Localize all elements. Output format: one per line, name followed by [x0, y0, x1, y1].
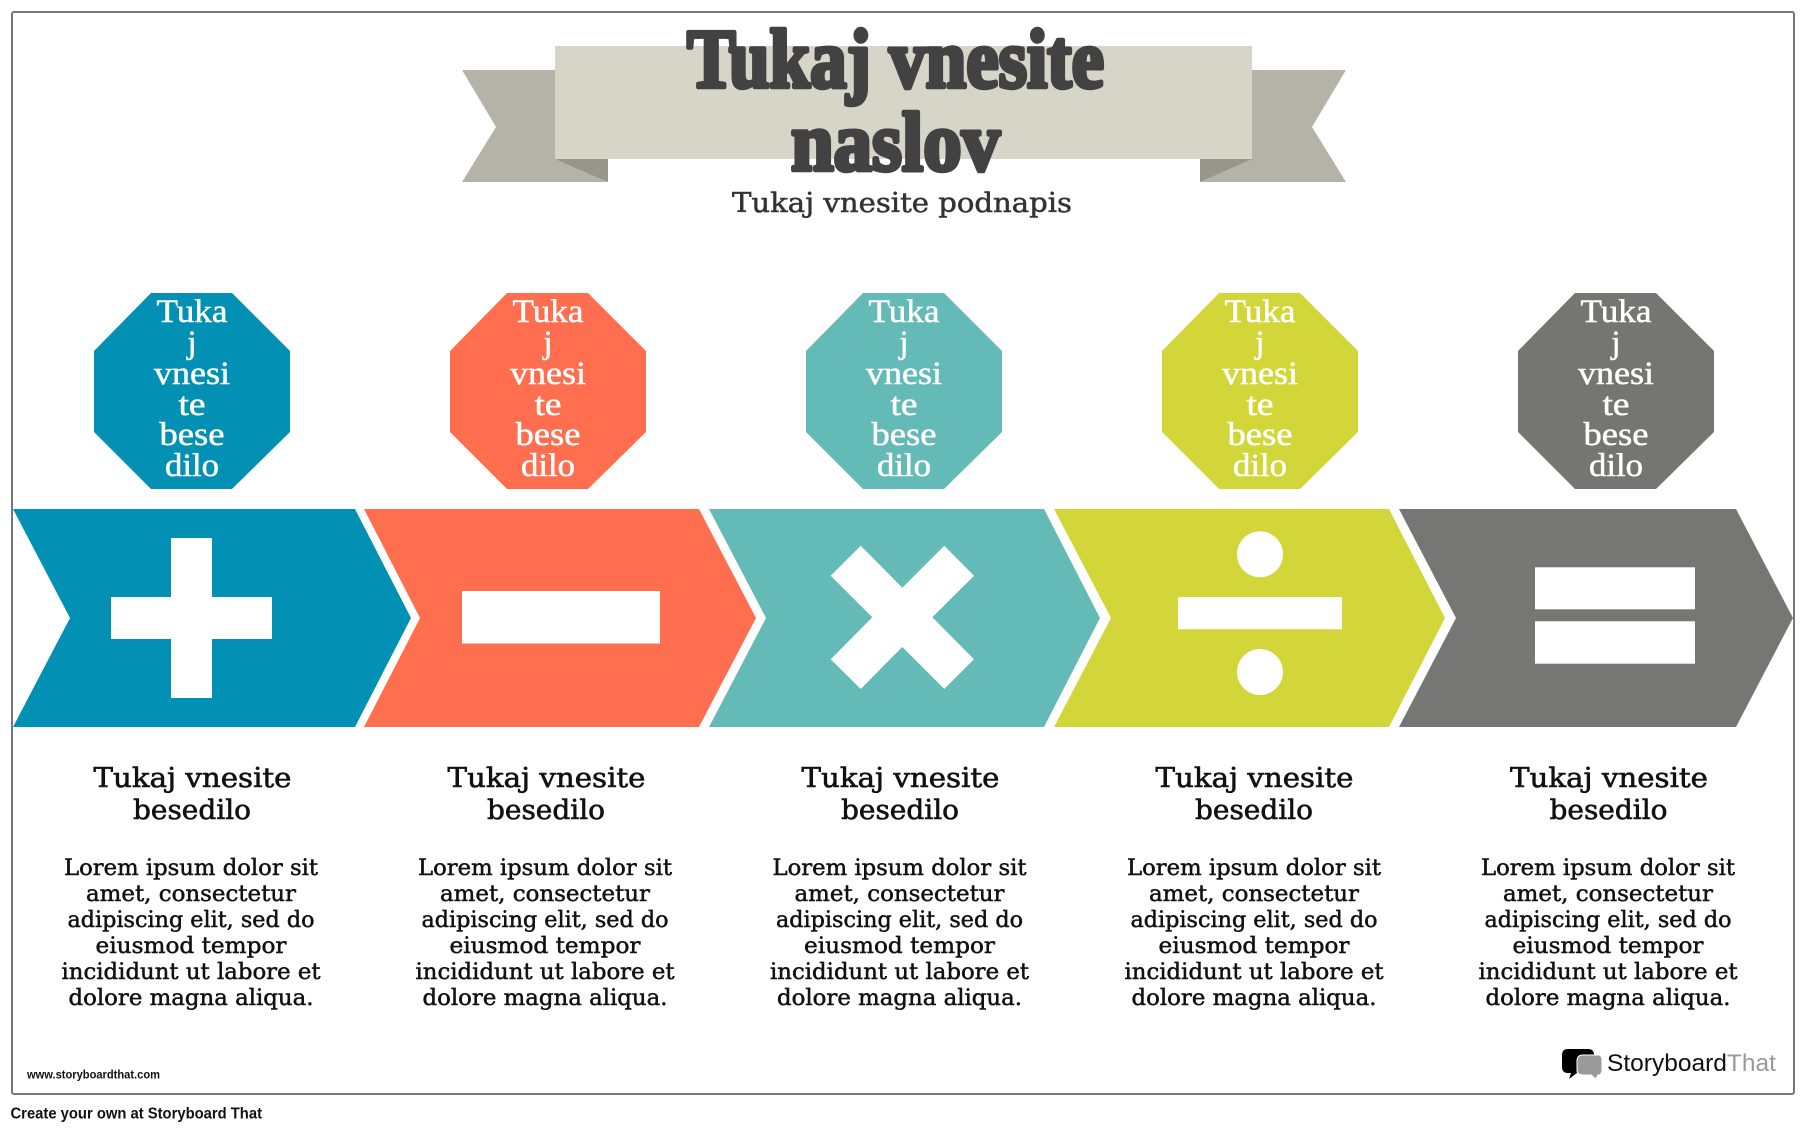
octagon 4: vnesi	[1222, 356, 1298, 392]
column 2 body	[416, 856, 675, 1011]
column 5 heading: Tukaj vnesite	[1510, 763, 1708, 794]
octagon 2: bese	[516, 417, 580, 453]
column 1 body: Lorem ipsum dolor sit	[64, 856, 318, 881]
octagon 3: vnesi	[866, 356, 942, 392]
octagon 5: te	[1602, 387, 1630, 423]
logo	[1562, 1049, 1776, 1079]
column 2 body: incididunt ut labore et	[416, 960, 675, 985]
octagon 5: bese	[1584, 417, 1648, 453]
banner left fold	[555, 159, 608, 182]
column 5 body: dolore magna aliqua.	[1486, 986, 1730, 1011]
octagon 3: te	[890, 387, 918, 423]
column 4 body: eiusmod tempor	[1158, 934, 1350, 959]
icon: times	[831, 546, 974, 689]
octagon 5	[1518, 293, 1714, 489]
logo wordmark: StoryboardThat	[1607, 1050, 1776, 1077]
chevron: divide	[1054, 509, 1445, 727]
octagon 3: dilo	[877, 448, 931, 484]
column 5 heading	[1510, 763, 1708, 826]
column 3 heading: Tukaj vnesite	[802, 763, 1000, 794]
footer credit: Create your own at Storyboard That	[10, 1106, 262, 1122]
octagon 5: dilo	[1589, 448, 1643, 484]
column 2 heading: besedilo	[487, 795, 605, 826]
octagon 1: te	[178, 387, 206, 423]
subtitle: Tukaj vnesite podnapis	[732, 188, 1072, 219]
column 2 heading	[448, 763, 646, 826]
column 3 text	[770, 763, 1029, 1011]
banner right tail	[1200, 70, 1346, 182]
octagon 4: bese	[1228, 417, 1292, 453]
column 5 body: amet, consectetur	[1503, 882, 1714, 907]
octagon 2: Tuka	[512, 294, 584, 330]
column 4 heading	[1156, 763, 1354, 826]
icon: equals	[1535, 567, 1695, 664]
chevron: plus	[13, 509, 411, 727]
column 1 body: dolore magna aliqua.	[68, 986, 314, 1011]
column 4 body: Lorem ipsum dolor sit	[1127, 856, 1381, 881]
title banner	[462, 46, 1346, 182]
octagon 1: Tuka	[156, 294, 228, 330]
column 2 text	[416, 763, 675, 1011]
website url: www.storyboardthat.com	[26, 1068, 160, 1082]
column 4 body	[1124, 856, 1384, 1011]
column 1 body: amet, consectetur	[86, 882, 297, 907]
octagon 4: dilo	[1233, 448, 1287, 484]
column 3 body: dolore magna aliqua.	[777, 986, 1022, 1011]
column 5 body: adipiscing elit, sed do	[1484, 908, 1732, 933]
column 2 body: Lorem ipsum dolor sit	[418, 856, 672, 881]
column 1 heading: besedilo	[133, 795, 251, 826]
chevron: equals	[1399, 509, 1793, 727]
octagon 2	[450, 293, 646, 489]
column 1 body: adipiscing elit, sed do	[68, 908, 314, 933]
octagon 3: j	[898, 325, 909, 361]
column 3 body: incididunt ut labore et	[770, 960, 1029, 985]
column 1 heading: Tukaj vnesite	[94, 763, 292, 794]
column 1 body	[62, 856, 321, 1011]
octagon 3: bese	[872, 417, 936, 453]
octagon 3: Tuka	[868, 294, 940, 330]
icon: minus	[462, 591, 660, 644]
column 5 body	[1478, 856, 1738, 1011]
column 5 text	[1478, 763, 1738, 1011]
column 3 body: amet, consectetur	[794, 882, 1005, 907]
icon: plus	[111, 538, 272, 698]
column 4 body: incididunt ut labore et	[1124, 960, 1384, 985]
octagon 2: te	[534, 387, 562, 423]
title: Tukaj vnesite	[687, 13, 1104, 106]
column 3 body: adipiscing elit, sed do	[776, 908, 1023, 933]
octagon 4: Tuka	[1224, 294, 1296, 330]
column 5 body: Lorem ipsum dolor sit	[1481, 856, 1735, 881]
banner main band	[555, 46, 1252, 159]
chevron: minus	[364, 509, 756, 727]
title: naslov	[791, 96, 1000, 189]
column 5 body: incididunt ut labore et	[1478, 960, 1738, 985]
octagon 5: vnesi	[1578, 356, 1654, 392]
banner left tail	[462, 70, 608, 182]
octagon 2: j	[542, 325, 553, 361]
icon: divide	[1178, 531, 1342, 695]
column 2 heading: Tukaj vnesite	[448, 763, 646, 794]
column 4 text	[1124, 763, 1384, 1011]
column 5 heading: besedilo	[1550, 795, 1668, 826]
chevron: times	[709, 509, 1100, 727]
column 2 body: adipiscing elit, sed do	[422, 908, 668, 933]
column 4 heading: Tukaj vnesite	[1156, 763, 1354, 794]
column 3 heading: besedilo	[841, 795, 959, 826]
octagon 1: j	[186, 325, 197, 361]
column 3 heading	[802, 763, 1000, 826]
octagon 1	[94, 293, 290, 489]
column 3 body: Lorem ipsum dolor sit	[772, 856, 1027, 881]
column 2 body: eiusmod tempor	[450, 934, 641, 959]
octagon 1: bese	[160, 417, 224, 453]
title	[687, 13, 1104, 189]
octagon 4: te	[1246, 387, 1274, 423]
icon: speech bubbles	[1562, 1049, 1602, 1079]
column 1 text	[62, 763, 321, 1011]
column 4 body: dolore magna aliqua.	[1132, 986, 1376, 1011]
column 3 body	[770, 856, 1029, 1011]
column 4 heading: besedilo	[1195, 795, 1313, 826]
column 1 heading	[94, 763, 292, 826]
column 2 body: amet, consectetur	[440, 882, 651, 907]
octagon 2: vnesi	[510, 356, 586, 392]
octagon 5: Tuka	[1580, 294, 1652, 330]
column 2 body: dolore magna aliqua.	[422, 986, 668, 1011]
column 4 body: amet, consectetur	[1149, 882, 1360, 907]
column 3 body: eiusmod tempor	[804, 934, 996, 959]
octagon 3	[806, 293, 1002, 489]
octagon 1: dilo	[165, 448, 219, 484]
column 5 body: eiusmod tempor	[1512, 934, 1704, 959]
column 4 body: adipiscing elit, sed do	[1130, 908, 1378, 933]
octagon 2: dilo	[521, 448, 575, 484]
octagon 4: j	[1254, 325, 1265, 361]
column 1 body: eiusmod tempor	[96, 934, 287, 959]
octagon 4	[1162, 293, 1358, 489]
octagon 5: j	[1610, 325, 1621, 361]
octagon 1: vnesi	[154, 356, 230, 392]
banner right fold	[1200, 159, 1252, 182]
column 1 body: incididunt ut labore et	[62, 960, 321, 985]
